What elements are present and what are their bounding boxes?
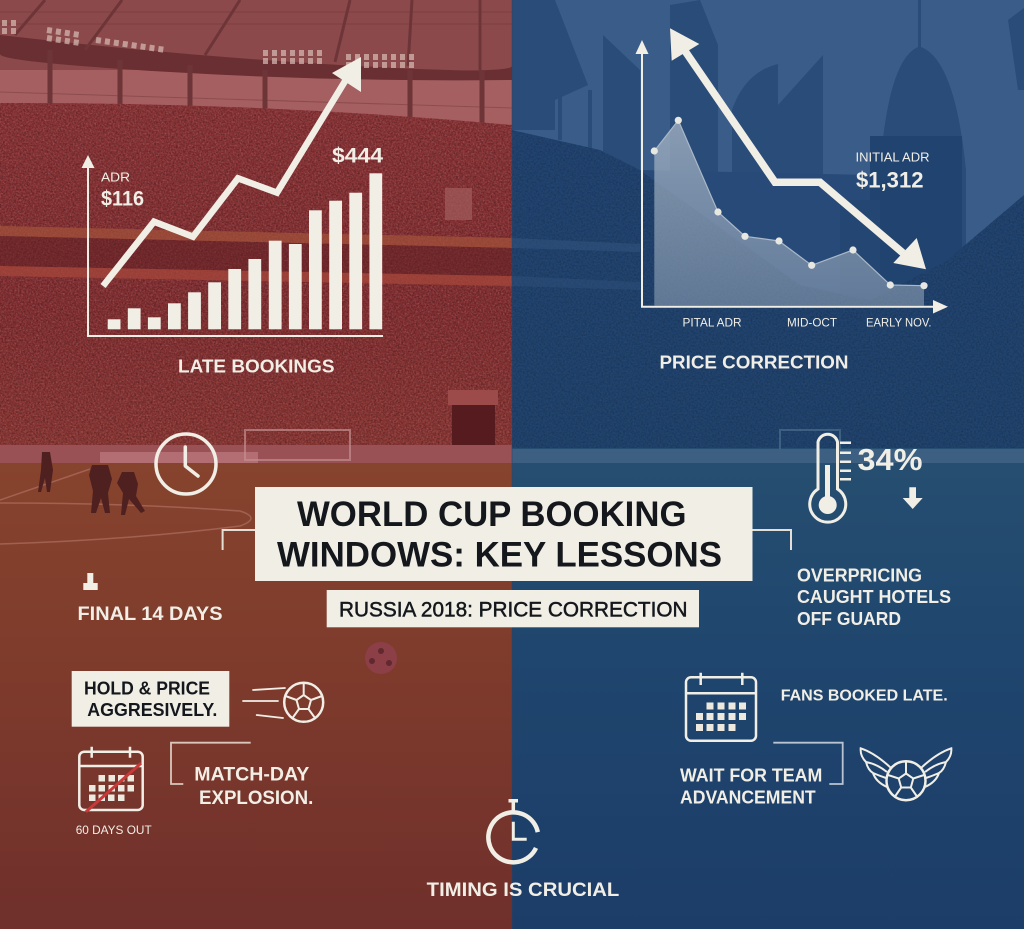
callout: hold and price aggressively: AGGRESIVELY. (87, 700, 217, 720)
axis label: mid-oct: MID-OCT (787, 316, 838, 330)
icon: small pedestal (83, 573, 98, 590)
panel: late bookings chart (82, 57, 383, 376)
background: skyline towers (512, 0, 1024, 248)
label: final 14 days: FINAL 14 DAYS (78, 604, 222, 625)
background: right blue skyline panel (512, 0, 1024, 742)
text: match-day explosion (194, 765, 313, 809)
axis label: pital ADR: PITAL ADR (682, 316, 742, 330)
title block: WORLD CUP BOOKING (297, 495, 686, 534)
faded background soccer ball (365, 642, 397, 674)
background: left red stadium panel (0, 0, 512, 929)
icon: winged soccer ball (861, 748, 951, 800)
text: wait for team advancement: ADVANCEMENT (680, 787, 816, 807)
subtitle block: RUSSIA 2018: PRICE CORRECTION (339, 598, 688, 622)
text: fans booked late: FANS BOOKED LATE. (781, 688, 948, 705)
icon: crossed-out calendar (79, 747, 143, 812)
chart axes (636, 40, 948, 314)
label: initial ADR: INITIAL ADR (856, 150, 930, 164)
value: $444: $444 (332, 144, 383, 168)
value: $1,312: $1,312 (856, 168, 924, 192)
icon: speeding soccer ball (243, 683, 323, 722)
icon: stopwatch (488, 801, 538, 862)
text: wait for team advancement (680, 766, 822, 807)
icon: clock (156, 434, 216, 494)
title block: WINDOWS: KEY LESSONS (277, 536, 722, 574)
label: timing is crucial: TIMING IS CRUCIAL (427, 880, 620, 901)
icon: calendar (686, 673, 756, 741)
value: 34%: 34% (858, 442, 922, 477)
text: match-day explosion: EXPLOSION. (199, 788, 313, 809)
value: $116: $116 (101, 188, 144, 210)
text: overpricing caught hotels off guard: CAUGHT HOTELS (797, 587, 951, 607)
callout: hold and price aggressively (72, 671, 229, 727)
text: overpricing caught hotels off guard: OVERPRICING (797, 566, 922, 586)
bar chart (108, 173, 382, 329)
subtitle block (327, 590, 699, 627)
center divider (512, 0, 513, 929)
title brackets (223, 530, 791, 550)
text: match-day explosion: MATCH-DAY (194, 765, 310, 786)
text: wait for team advancement: WAIT FOR TEAM (680, 766, 822, 786)
chart axes (82, 155, 383, 336)
area chart (651, 117, 928, 306)
bracket: team advancement (773, 743, 843, 784)
label: 60 days out: 60 DAYS OUT (76, 823, 152, 837)
thermometer stat (797, 434, 951, 629)
callout: hold and price aggressively: HOLD & PRICE (84, 678, 210, 698)
icon: down arrow (903, 487, 923, 509)
rising trend arrow (103, 57, 361, 286)
panel: price correction chart (636, 28, 948, 373)
heading: late bookings: LATE BOOKINGS (178, 356, 334, 376)
falling trend arrow (670, 28, 926, 269)
label: ADR: ADR (101, 170, 130, 184)
text: overpricing caught hotels off guard (797, 566, 951, 629)
axis label: early nov: EARLY NOV. (866, 316, 932, 330)
bracket: match-day (171, 743, 251, 784)
background players (38, 452, 145, 515)
text: overpricing caught hotels off guard: OFF GUARD (797, 609, 901, 629)
heading: price correction: PRICE CORRECTION (660, 352, 848, 372)
title block (255, 487, 752, 581)
icon: thermometer (810, 434, 851, 522)
